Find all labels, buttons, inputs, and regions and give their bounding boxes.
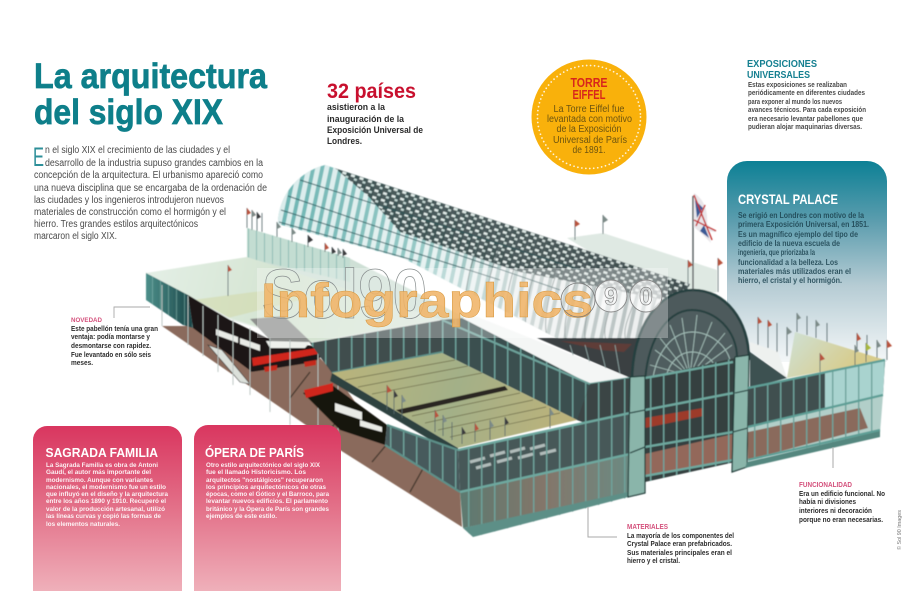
text: introduction: E (33, 142, 44, 172)
panel: Sagrada Familia: los elementos naturales. (46, 521, 120, 528)
text: introduction: una nueva disciplina que se encargaba de la ordenación de (34, 183, 267, 194)
callout: Novedad: NOVEDAD (71, 317, 102, 324)
panel: Ópera de París: Otro estilo arquitectónico del siglo XIX (206, 462, 320, 469)
panel: Ópera de París: los principios arquitectónicos de otras (206, 484, 326, 491)
black pavilion wall (188, 295, 322, 372)
callout: 32 países (327, 80, 423, 147)
badge: Torre Eiffel: levantada con motivo (547, 114, 632, 125)
panel: Ópera de París (194, 425, 341, 591)
text: introduction: hierro. Tres grandes estilos arquitectónicos (34, 219, 198, 230)
text: Crystal Palace description: hierro, el cristal y el hormigón. (738, 276, 842, 285)
watermark: Sol90 Infographics: Sol90 (262, 255, 427, 333)
panel: Sagrada Familia: entre los años 1890 y 1910. Recuperó el (46, 498, 166, 505)
slender columns (162, 285, 338, 450)
panel: Sagrada Familia: Gaudí, el autor más importante del (46, 469, 151, 476)
stair (208, 345, 250, 384)
panel: Ópera de París: épocas, como el Gótico y el Barroco, para (206, 491, 329, 498)
panel: Ópera de París: arquitectos "nostálgicos" recuperaron (206, 477, 323, 484)
back wing roof and wall (247, 228, 470, 325)
text: Crystal Palace description: Se erigió en Londres con motivo de la (738, 211, 865, 220)
watermark: Sol90 Infographics: 0 (639, 283, 653, 311)
text: introduction (33, 142, 267, 242)
callout: 32 países: Londres. (327, 136, 362, 147)
callout: Funcionalidad: FUNCIONALIDAD (799, 482, 852, 489)
title (34, 57, 267, 132)
second black section (303, 383, 387, 445)
badge: Torre Eiffel: de la Exposición (556, 124, 622, 135)
panel: Sagrada Familia: las líneas curvas y copió las formas de (46, 513, 161, 520)
callout: Funcionalidad: porque no eran necesarias. (799, 515, 883, 524)
callout: Novedad: Fue levantado en sólo seis (71, 350, 151, 359)
far roof behind vault (567, 233, 717, 300)
illustration: Crystal Palace building (146, 160, 892, 537)
badge: Torre Eiffel: TORRE (570, 76, 608, 90)
text: Crystal Palace description (738, 211, 869, 285)
left roof (146, 257, 442, 343)
front facade left of entrance (458, 413, 630, 537)
floor (162, 326, 462, 527)
panel: Sagrada Familia: nacionales, el modernismo fue un estilo (46, 484, 166, 491)
heading: Crystal Palace: CRYSTAL PALACE (738, 191, 838, 207)
towers (628, 355, 749, 497)
panel: Sagrada Familia (33, 426, 182, 591)
panel: Sagrada Familia: modernismo. Aunque con variantes (46, 477, 153, 484)
callout: Materiales: MATERIALES (627, 524, 668, 531)
text: introduction: las ciudades y los ingenieros introdujeron nuevos (34, 195, 224, 206)
watermark: Sol90 Infographics: Infographics (261, 275, 593, 328)
text: introduction: concepción de la arquitectura. El urbanismo apareció como (34, 170, 263, 181)
text: introduction: desarrollo de la industria supuso grandes cambios en la (45, 158, 263, 169)
text block: Exposiciones universales: periódicamente en diferentes ciudades (748, 88, 865, 97)
callout: Materiales: Sus materiales principales eran el (627, 548, 732, 557)
callout: Novedad: Este pabellón tenía una gran (71, 324, 158, 333)
title: del siglo XIX (34, 93, 224, 132)
text block: Exposiciones universales: para exponer al mundo los nuevos (748, 97, 842, 106)
flags (228, 208, 892, 444)
panel: Ópera de París: ÓPERA DE PARÍS (205, 445, 304, 460)
callout: Materiales (588, 507, 734, 565)
badge: Torre Eiffel: La Torre Eiffel fue (554, 104, 625, 115)
text: Crystal Palace description: ingeniería, que priorizaba la (738, 248, 815, 257)
nave front wall (577, 378, 630, 423)
text: introduction: n el siglo XIX el crecimiento de las ciudades y el (45, 145, 230, 156)
callout: Novedad (71, 307, 158, 367)
vault roof (278, 164, 690, 339)
panel: Sagrada Familia: valor de la producción artesanal, utilizó (46, 506, 165, 513)
watermark: Sol90 Infographics: 9 (604, 283, 618, 311)
panel: Sagrada Familia: que influyó en el diseño y la arquitectura (46, 491, 168, 498)
nave interior (537, 338, 668, 378)
callout: Funcionalidad (799, 447, 885, 524)
watermark: Sol90 Infographics (257, 255, 668, 338)
badge: Torre Eiffel (532, 60, 646, 174)
text block: Exposiciones universales: era necesario levantar pabellones que (748, 114, 863, 123)
title: La arquitectura (34, 57, 267, 96)
front left glass wall (385, 425, 460, 492)
text: Crystal Palace description: Es un magnífico ejemplo del tipo de (738, 230, 859, 239)
nave white strip (462, 316, 628, 384)
panel: Sagrada Familia: La Sagrada Familia es obra de Antoni (46, 462, 158, 469)
text: Crystal Palace description: materiales más utilizados eran el (738, 267, 851, 276)
entrance facade (645, 358, 735, 482)
panel: Ópera de París: británico y la Ópera de París son grandes (206, 504, 329, 513)
right wing (745, 332, 885, 468)
badge: Torre Eiffel: EIFFEL (572, 88, 606, 102)
callout: 32 países: asistieron a la (327, 102, 386, 113)
text block: Exposiciones universales: pudieran alojar maquinarias diversas. (748, 122, 862, 131)
callout: Novedad: desmontarse con rapidez. (71, 341, 151, 350)
callout: Novedad: ventaja: podía montarse y (71, 332, 151, 341)
text: introduction: materiales de construcción como el hormigón y el (34, 207, 226, 218)
text: Crystal Palace description: primera Exposición Universal, en 1851. (738, 220, 869, 229)
text block: Exposiciones universales: UNIVERSALES (747, 69, 810, 81)
panel: Ópera de París: fue el llamado Historicismo. Los (206, 469, 306, 476)
callout: Funcionalidad: Era un edificio funcional. No (799, 489, 885, 498)
panel: Crystal Palace (727, 161, 887, 362)
left end wall (146, 273, 193, 328)
callout: Funcionalidad: había ni divisiones (799, 497, 856, 506)
badge: Torre Eiffel: Universal de París (553, 135, 627, 146)
panel: Ópera de París: levantar nuevos edificios. El parlamento (206, 498, 328, 505)
text block: Exposiciones universales: avances técnicos. Para cada exposición (748, 105, 866, 114)
text block: Exposiciones universales: EXPOSICIONES (747, 58, 817, 70)
callout: Funcionalidad: interiores ni decoración (799, 506, 872, 515)
text: introduction: marcaron el siglo XIX. (34, 231, 117, 242)
courtyard back wall (310, 320, 443, 373)
callout: Novedad: meses. (71, 358, 93, 367)
text: Crystal Palace description: funcionalidad a la belleza. Los (738, 258, 839, 267)
credit: © Sol 90 Images (896, 510, 903, 550)
panel: Ópera de París: ejemplos de este estilo. (206, 513, 277, 520)
callout: 32 países: Exposición Universal de (327, 125, 423, 136)
callout: Materiales: hierro y el cristal. (627, 556, 680, 565)
entrance arch (632, 290, 749, 388)
text block: Exposiciones universales (747, 58, 866, 131)
courtyard front railing (330, 373, 458, 456)
callout: Materiales: Crystal Palace eran prefabricados. (627, 539, 732, 548)
text block: Exposiciones universales: Estas exposiciones se realizaban (748, 80, 847, 89)
callout: 32 países: 32 países (327, 80, 416, 103)
courtyard side wall (440, 318, 630, 425)
badge: Torre Eiffel: de 1891. (572, 145, 606, 156)
green courtyard floor (332, 353, 577, 448)
callout: 32 países: inauguración de la (327, 114, 405, 125)
panel: Sagrada Familia: SAGRADA FAMILIA (46, 445, 159, 460)
icon: Union flag (693, 193, 716, 290)
callout: Materiales: La mayoría de los componentes del (627, 531, 734, 540)
text: Crystal Palace description: edificio de la nueva escuela de (738, 239, 841, 248)
